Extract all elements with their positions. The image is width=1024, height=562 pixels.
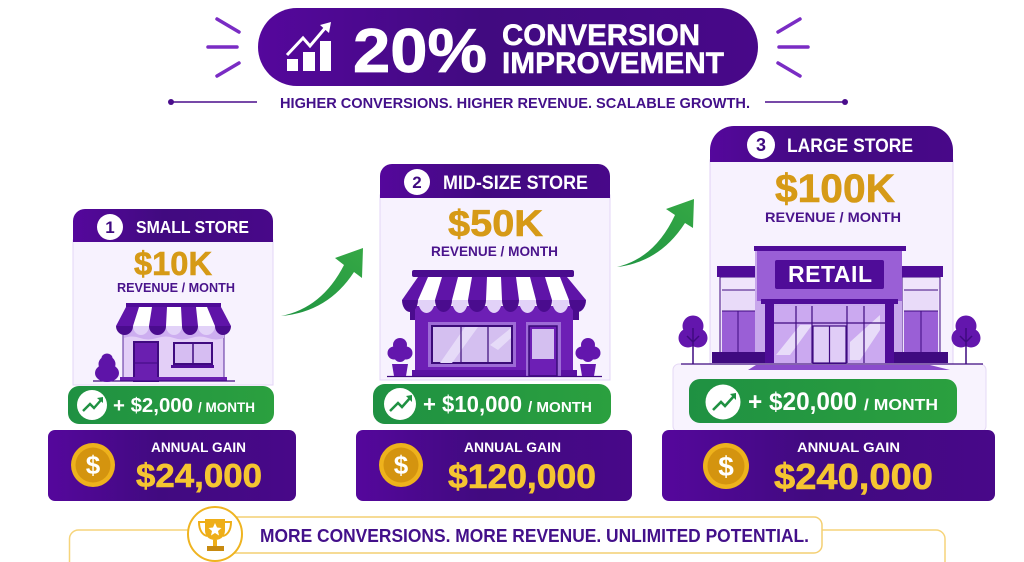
annual gain: small store: $ xyxy=(86,450,101,480)
annual gain: mid-size store xyxy=(356,430,632,501)
decorative rays left xyxy=(208,19,239,76)
revenue: $10K xyxy=(134,245,212,282)
annual gain: large store: $ xyxy=(718,451,734,482)
green gain badge: small store: + $2,000 xyxy=(113,395,193,417)
green gain badge: mid-size store xyxy=(373,384,611,424)
annual gain: small store xyxy=(48,430,296,501)
decorative rays right xyxy=(778,19,808,76)
revenue: $50K xyxy=(448,203,543,244)
revenue: REVENUE / MONTH xyxy=(117,280,235,295)
arrow: mid to large xyxy=(617,199,694,267)
green gain badge: large store xyxy=(689,379,957,423)
card header: SMALL STORE xyxy=(136,217,249,237)
annual gain: mid-size store: $ xyxy=(394,450,409,480)
card header: 3 xyxy=(756,135,766,155)
revenue xyxy=(117,245,235,295)
icon: trophy xyxy=(188,507,242,561)
heading: 20%: 20% xyxy=(353,17,487,86)
icon: small shop xyxy=(93,303,235,382)
annual gain: large store xyxy=(662,430,995,501)
sign xyxy=(775,260,884,289)
bottom tagline: MORE CONVERSIONS. MORE REVENUE. UNLIMITED POTENTIAL. xyxy=(260,526,809,546)
green gain badge: large store: / MONTH xyxy=(864,397,938,414)
annual gain: mid-size store: $120,000 xyxy=(448,458,596,496)
annual gain: mid-size store: ANNUAL GAIN xyxy=(464,440,561,455)
icon: retail building xyxy=(678,246,983,370)
icon: growth chart xyxy=(287,22,331,71)
card header xyxy=(710,126,953,162)
panel: small store xyxy=(73,209,273,385)
annual gain: large store: $240,000 xyxy=(774,456,933,497)
panel: large store xyxy=(673,126,986,432)
bottom panel outline xyxy=(70,530,945,562)
card header: 2 xyxy=(412,173,422,192)
annual gain: small store: ANNUAL GAIN xyxy=(151,440,246,455)
sign: RETAIL xyxy=(788,261,872,287)
arrow: small to mid xyxy=(281,248,363,316)
annual gain: small store: $24,000 xyxy=(136,457,262,494)
subtitle: HIGHER CONVERSIONS. HIGHER REVENUE. SCALABLE GROWTH. xyxy=(280,95,750,112)
card header xyxy=(73,209,273,242)
annual gain: large store: ANNUAL GAIN xyxy=(797,440,900,455)
card header: MID-SIZE STORE xyxy=(443,173,588,194)
heading: conversion improvement: IMPROVEMENT xyxy=(502,47,724,80)
green gain badge: small store: / MONTH xyxy=(198,399,255,415)
card header: LARGE STORE xyxy=(787,136,913,157)
green gain badge: small store xyxy=(68,386,274,424)
green gain badge: large store: + $20,000 xyxy=(748,388,857,416)
heading: conversion improvement: CONVERSION xyxy=(502,19,700,52)
bottom tagline xyxy=(225,517,822,553)
platform xyxy=(673,364,986,432)
card header: 1 xyxy=(105,218,115,237)
panel: mid-size store xyxy=(380,164,610,380)
revenue: REVENUE / MONTH xyxy=(431,243,558,259)
green gain badge: mid-size store: / MONTH xyxy=(528,399,592,416)
heading: conversion improvement xyxy=(502,19,724,80)
revenue xyxy=(431,203,558,259)
green gain badge: mid-size store: + $10,000 xyxy=(423,391,522,417)
icon: mid-size shop xyxy=(387,270,602,376)
title banner xyxy=(258,8,758,86)
revenue: $100K xyxy=(775,167,895,211)
revenue: REVENUE / MONTH xyxy=(765,209,901,225)
card header xyxy=(380,164,610,198)
revenue xyxy=(765,167,901,225)
